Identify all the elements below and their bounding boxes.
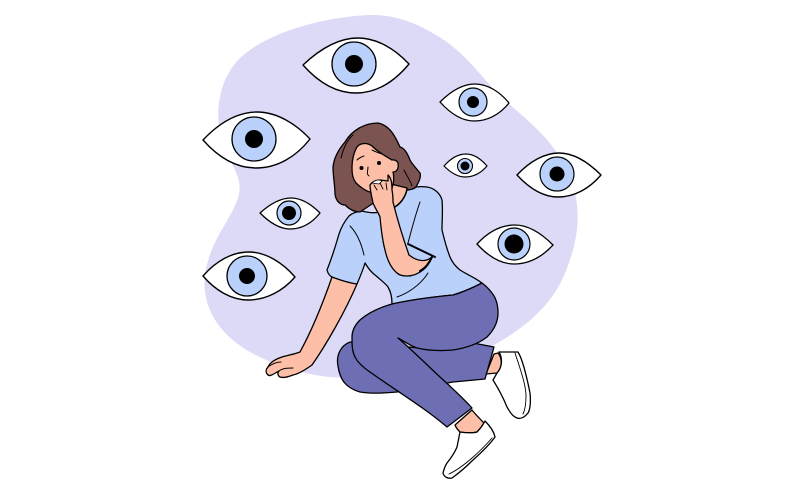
eye: top	[303, 38, 409, 93]
ankle: front leg	[455, 410, 484, 433]
eye: lower right	[477, 225, 553, 264]
hair	[333, 123, 420, 212]
pants: far leg	[338, 342, 494, 393]
eye: middle left	[260, 198, 320, 229]
eye: small centre	[444, 154, 487, 177]
arm: support arm and hand	[266, 277, 357, 377]
face	[352, 144, 398, 192]
eye: lower left	[203, 252, 295, 300]
ankle: back leg	[486, 353, 501, 374]
mouth: teeth	[372, 180, 382, 184]
woman	[266, 123, 530, 478]
sleeve shadow	[408, 244, 435, 271]
eye: right	[517, 153, 601, 197]
shoe: back foot	[493, 352, 530, 418]
eye: upper right	[440, 84, 509, 121]
shoe: front foot	[443, 421, 495, 478]
eye: upper left	[203, 112, 310, 168]
neck	[391, 184, 407, 208]
t-shirt	[327, 187, 482, 304]
forearm and fist	[370, 175, 432, 276]
background blob	[205, 15, 578, 378]
pants: near leg	[352, 283, 498, 427]
facial features	[357, 150, 382, 176]
